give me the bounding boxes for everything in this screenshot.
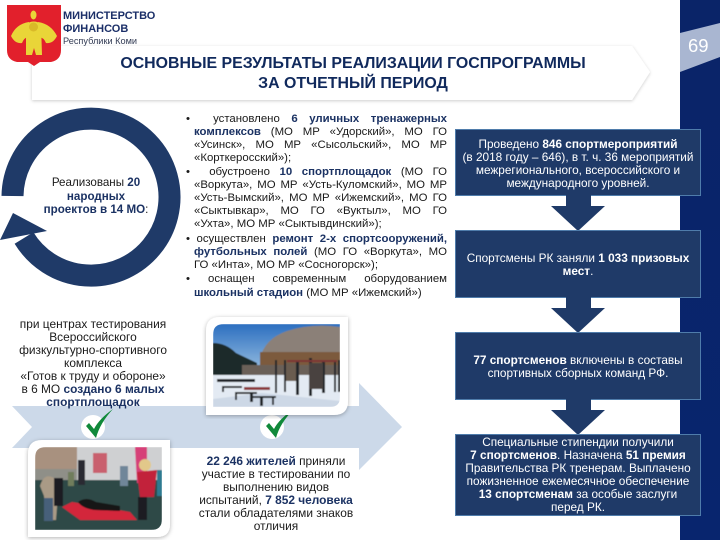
right navy band [680, 0, 720, 540]
title [120, 55, 586, 92]
page number: 69 [688, 35, 709, 56]
text: residents tested: выполнению видов [223, 480, 329, 494]
box: national teams: спортивных сборных команд РФ. [488, 366, 668, 380]
text: small sports grounds: физкультурно-спортивного [19, 343, 167, 357]
arrow down 3 [551, 399, 605, 434]
circle caption: народных [67, 190, 125, 202]
results list: «Усть-Вымский», МО МР «Ижемский», МО ГО [194, 192, 447, 204]
title banner [30, 46, 651, 102]
ministry name [63, 10, 155, 46]
box: sports events: международного уровней. [506, 176, 650, 190]
results list: «Корткеросский»); [194, 152, 291, 164]
circle caption: проектов в 14 МО: [44, 203, 148, 216]
results list: • осуществлен ремонт 2-х спортсооружений, [186, 233, 447, 245]
photo: winter sports ground [204, 316, 350, 418]
arrow down 1 [551, 195, 605, 230]
box: sports events: межрегионального, всероссийского и [476, 162, 680, 176]
box: prize places: Спортсмены РК заняли 1 033 призовых мест. [467, 250, 689, 278]
text: small sports grounds: при центрах тестирования [20, 317, 166, 331]
text: residents tested: отличия [254, 519, 298, 533]
box: stipends: 7 спортсменов. Назначена 51 премия [470, 448, 686, 462]
timeline arrow [12, 383, 402, 470]
box: prize places [455, 230, 701, 298]
box: stipends: Специальные стипендии получили [482, 435, 674, 449]
ministry name: ФИНАНСОВ [63, 23, 128, 35]
results list: • установлено 6 уличных тренажерных [186, 113, 447, 125]
box: sports events: Проведено 846 спортмероприятий [478, 136, 677, 150]
results list: «Сыктывкар», МО ГО «Вуктыл», МО ГО [194, 205, 447, 217]
box: stipends: пожизненное ежемесячное обеспечение [467, 474, 689, 488]
text: small sports grounds: «Готов к труду и обороне» [20, 369, 166, 383]
text: residents tested: 22 246 жителей приняли [207, 454, 345, 468]
box: stipends: Правительства РК тренерам. Выплачено [465, 461, 691, 475]
box: sports events: (в 2018 году – 646), в т. ч. 36 мероприятий [462, 150, 694, 164]
box: stipends [455, 434, 701, 516]
coat of arms [7, 5, 61, 66]
marker 2 [260, 415, 288, 439]
results list: • обустроено 10 спортплощадок (МО ГО [186, 166, 447, 178]
text: small sports grounds: спортплощадок [46, 395, 140, 409]
ministry name: Республики Коми [63, 36, 137, 46]
text: residents tested: участие в тестировании по [202, 467, 350, 481]
title: ОСНОВНЫЕ РЕЗУЛЬТАТЫ РЕАЛИЗАЦИИ ГОСПРОГРАММЫ [120, 55, 586, 72]
results list [186, 113, 447, 299]
results list: • оснащен современным оборудованием [186, 273, 447, 285]
text: small sports grounds: в 6 МО создано 6 малых [21, 382, 165, 396]
text: residents tested: стали обладателями знаков [199, 506, 353, 520]
circle caption: Реализованы 20 [52, 176, 140, 189]
box: stipends: перед РК. [551, 500, 605, 514]
text: small sports grounds: Всероссийского [49, 330, 137, 344]
results list: комплексов (МО МР «Удорский», МО ГО [194, 126, 447, 138]
box: national teams: 77 спортсменов включены в составы [473, 352, 683, 366]
text: small sports grounds [19, 317, 167, 409]
box: national teams [455, 332, 701, 400]
title: ЗА ОТЧЕТНЫЙ ПЕРИОД [258, 75, 448, 92]
arrow down 2 [551, 297, 605, 332]
page number ribbon [680, 23, 720, 72]
circular arrow [0, 108, 181, 287]
results list: ГО «Инта», МО МР «Сосногорск»); [194, 259, 378, 271]
results list: школьный стадион (МО МР «Ижемский») [194, 287, 422, 299]
results list: футбольных полей (МО ГО «Воркута», МО [194, 246, 447, 258]
photo: gym test [26, 438, 172, 540]
text: residents tested [199, 454, 353, 533]
circle caption [44, 176, 148, 216]
results list: «Ухта», МО МР «Сыктывдинский»); [194, 218, 382, 230]
text: small sports grounds: комплекса [64, 356, 122, 370]
box: sports events [455, 129, 701, 196]
marker 1 [81, 409, 113, 439]
box: stipends: 13 спортсменам за особые заслуги [479, 487, 677, 501]
results list: «Воркута», МО МР «Усть-Куломский», МО МР [194, 179, 447, 191]
text: residents tested: испытаний, 7 852 человека [199, 493, 353, 507]
ministry name: МИНИСТЕРСТВО [63, 10, 155, 22]
results list: «Усинск», МО МР «Сысольский», МО МР [194, 139, 447, 151]
